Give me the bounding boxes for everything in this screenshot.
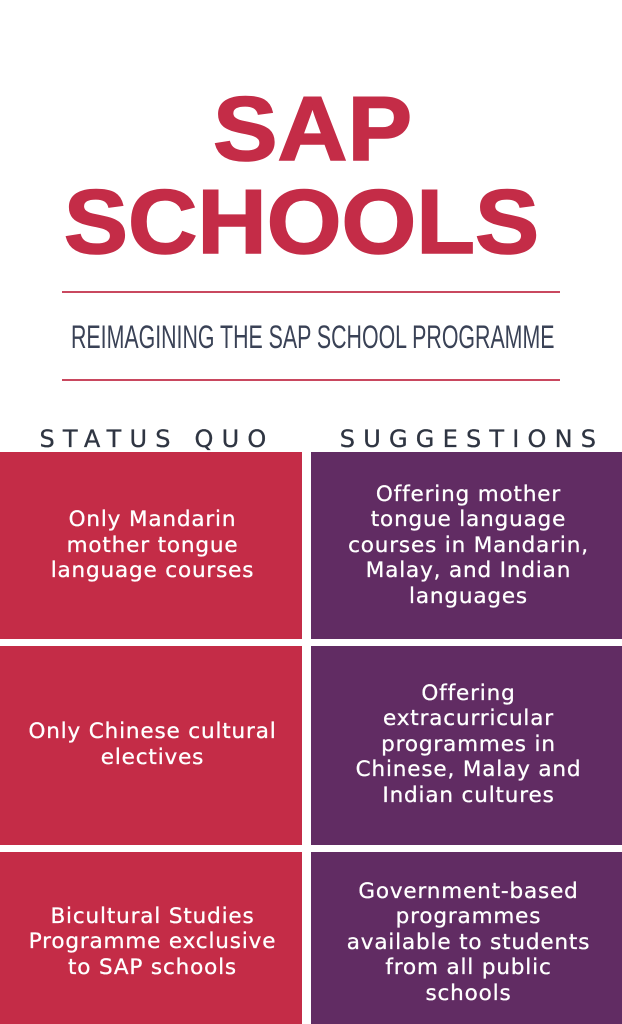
panel: status quo row 1: Only Mandarin (69, 507, 236, 532)
panel: suggestion row 1 (311, 452, 622, 639)
panel: suggestion row 3: schools (425, 981, 512, 1006)
panel: suggestion row 3: Government-based (358, 879, 579, 904)
panel: suggestion row 1: courses in Mandarin, (348, 533, 589, 558)
panel: suggestion row 2: Offering (421, 681, 516, 706)
panel: suggestion row 2: Indian cultures (382, 783, 555, 808)
panel: suggestion row 2 (311, 646, 622, 845)
panel: suggestion row 2: Chinese, Malay and (356, 757, 581, 782)
panel: status quo row 3: Bicultural Studies (50, 904, 255, 929)
panel: suggestion row 1: languages (409, 584, 528, 609)
panel: status quo row 3 (0, 852, 302, 1024)
subtitle: REIMAGINING THE SAP SCHOOL PROGRAMME (71, 319, 554, 355)
panel: status quo row 2: electives (101, 744, 204, 770)
heading: status quo: STATUS QUO (39, 425, 275, 453)
panel: suggestion row 3: available to students (347, 930, 590, 955)
panel: suggestion row 2: extracurricular (383, 706, 554, 731)
title line: SCHOOLS: SCHOOLS (64, 172, 539, 272)
panel: status quo row 3: to SAP schools (68, 955, 237, 980)
title line: SAP: SAP (213, 78, 412, 180)
heading: suggestions: SUGGESTIONS (340, 425, 604, 453)
panel: suggestion row 1: Offering mother (376, 482, 561, 507)
panel: status quo row 2 (0, 646, 302, 845)
panel: status quo row 1 (0, 452, 302, 639)
panel: status quo row 1: mother tongue (67, 533, 238, 558)
panel: suggestion row 3 (311, 852, 622, 1024)
panel: suggestion row 1: tongue language (371, 507, 566, 532)
panel: status quo row 1: language courses (51, 558, 254, 583)
panel: suggestion row 2: programmes in (381, 732, 556, 757)
panel: suggestion row 1: Malay, and Indian (366, 558, 571, 583)
panel: suggestion row 3: programmes (396, 904, 541, 929)
panel: suggestion row 3: from all public (385, 955, 552, 980)
panel: status quo row 3: Programme exclusive (29, 929, 276, 954)
panel: status quo row 2: Only Chinese cultural (28, 719, 277, 744)
